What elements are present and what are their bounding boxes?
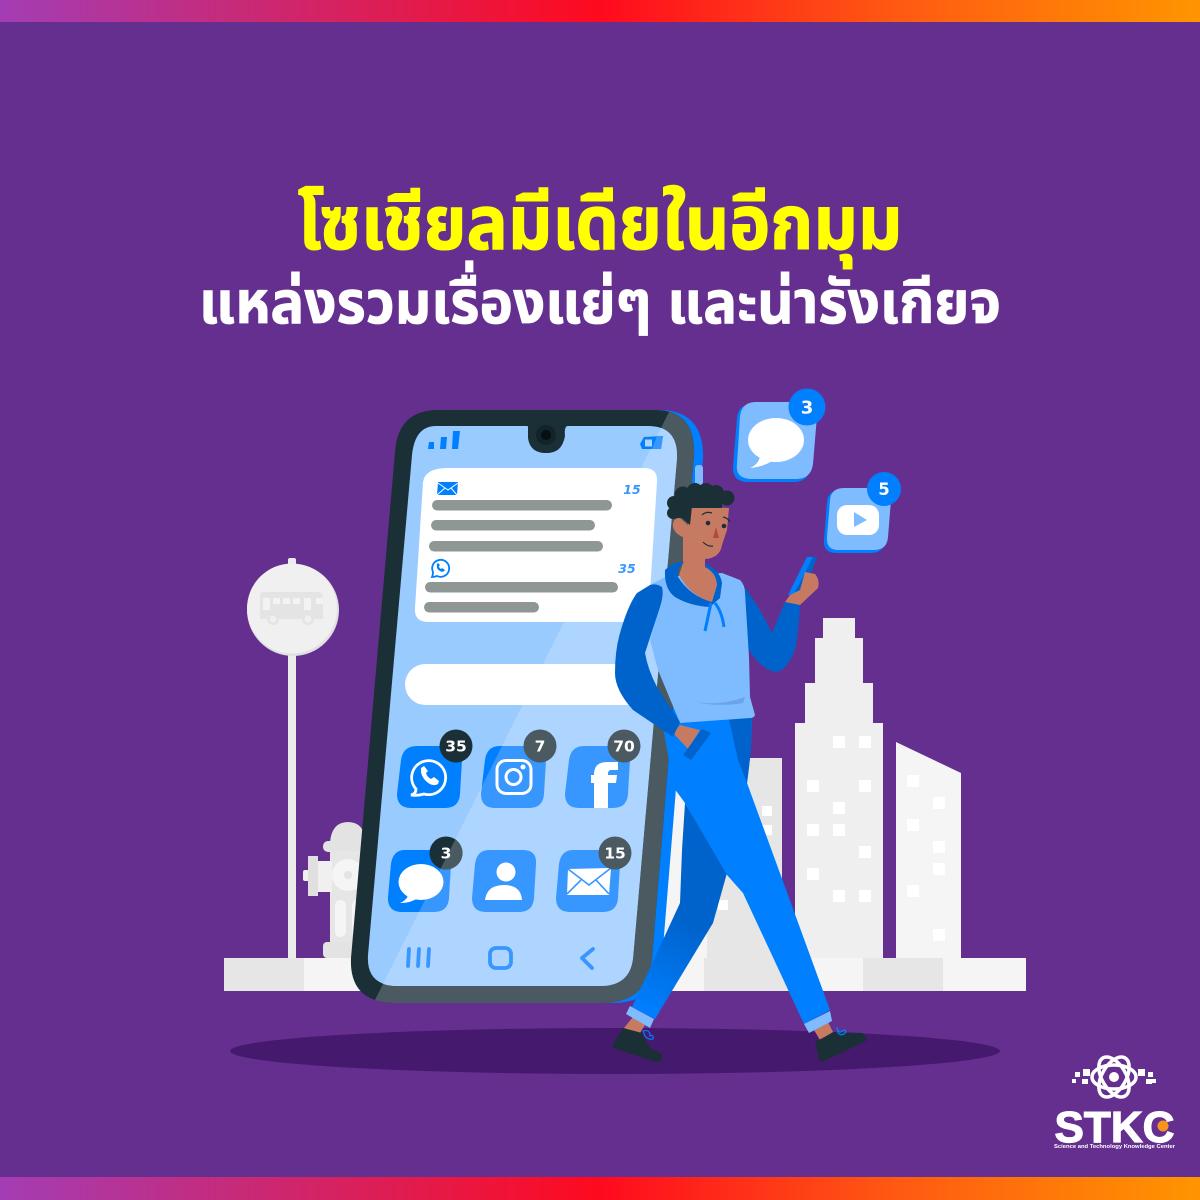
left cuff and ankle bbox=[624, 1006, 654, 1036]
icon: speech bubble bbox=[748, 418, 804, 468]
logo wordmark: STKC bbox=[1054, 1103, 1174, 1152]
pants shadow bbox=[728, 712, 752, 783]
pavement bbox=[224, 958, 1026, 991]
badge 3: 3 bbox=[801, 398, 813, 418]
hoodie body bbox=[650, 573, 755, 723]
icon: bus bbox=[260, 592, 323, 625]
hair bbox=[667, 483, 734, 525]
text placeholder lines bbox=[429, 500, 612, 552]
building behind person bbox=[660, 758, 782, 958]
badge 35 bbox=[440, 730, 472, 762]
tile: messages bbox=[388, 850, 451, 912]
camera notch bbox=[528, 425, 566, 453]
tall stepped building bbox=[795, 618, 883, 958]
neck and face bbox=[673, 506, 729, 602]
badge 5: 5 bbox=[878, 480, 890, 499]
icon: instagram glyph bbox=[497, 760, 531, 794]
whatsapp notification bbox=[424, 560, 636, 612]
badge 7 bbox=[524, 730, 556, 762]
icon: speech bubble bbox=[398, 864, 444, 903]
text placeholder lines bbox=[424, 582, 618, 612]
person walking with phone bbox=[612, 483, 866, 1062]
right shoe bbox=[815, 1032, 866, 1062]
hoodie drawstrings bbox=[705, 603, 724, 631]
city skyline and pavement bbox=[224, 618, 1026, 991]
icon: envelope bbox=[437, 482, 458, 495]
right cuff and ankle bbox=[804, 1011, 833, 1040]
hand bbox=[785, 572, 819, 605]
tile: contact bbox=[472, 850, 536, 912]
icon: envelope bbox=[567, 868, 611, 895]
mail notification bbox=[429, 482, 641, 552]
badge 3 bbox=[430, 836, 462, 870]
hoodie hem shadow bbox=[687, 697, 745, 705]
slanted-roof building bbox=[896, 742, 961, 958]
badge 70 bbox=[608, 730, 640, 762]
subtitle: แหล่งรวมเรื่องแย่ๆ และน่ารังเกียจ bbox=[199, 260, 1001, 336]
signal bars bbox=[428, 431, 460, 449]
icon: whatsapp bbox=[432, 560, 449, 577]
bus stop sign bbox=[247, 558, 339, 958]
badge 7: 7 bbox=[535, 738, 545, 756]
screen bbox=[368, 426, 677, 986]
logo tagline: Science and Technology Knowledge Center bbox=[1054, 1144, 1175, 1150]
phone body bbox=[351, 410, 694, 1003]
tile: instagram bbox=[481, 746, 546, 808]
logo orange dot bbox=[1158, 1120, 1168, 1132]
shoe laces bbox=[643, 1027, 846, 1039]
icon: play button bbox=[837, 505, 879, 535]
tile: whatsapp bbox=[397, 746, 462, 808]
icon: whatsapp glyph bbox=[411, 761, 446, 795]
badge 35: 35 bbox=[445, 738, 467, 756]
count 35: 35 bbox=[618, 561, 636, 576]
notification card bbox=[415, 468, 657, 622]
ground shadow bbox=[230, 1028, 1000, 1074]
battery icon bbox=[640, 436, 663, 449]
held phone bbox=[788, 557, 817, 595]
count 15: 15 bbox=[623, 482, 641, 497]
title: โซเชียลมีเดียในอีกมุม bbox=[298, 181, 902, 269]
logo atom mark bbox=[1072, 1052, 1156, 1102]
app icon tiles bbox=[388, 746, 630, 912]
badge 15 bbox=[598, 836, 632, 870]
hood collar bbox=[665, 562, 722, 607]
right sleeve bbox=[740, 582, 800, 672]
bottom gradient bar bbox=[0, 1177, 1200, 1200]
phone back edge bbox=[590, 410, 703, 1003]
badge 15: 15 bbox=[604, 844, 626, 862]
notification badges bbox=[430, 730, 640, 870]
pocket hand bbox=[673, 725, 711, 760]
STKC logo bbox=[1054, 1052, 1175, 1152]
left sleeve bbox=[615, 584, 680, 737]
icon: facebook f bbox=[591, 762, 618, 808]
badge 3: 3 bbox=[441, 844, 451, 862]
navigation bar icons bbox=[408, 948, 593, 968]
icon: person bbox=[485, 862, 522, 900]
smartphone bbox=[351, 410, 703, 1003]
top gradient bar bbox=[0, 0, 1200, 22]
floating message bubble bbox=[733, 388, 826, 482]
floating video bubble bbox=[824, 472, 901, 553]
tile: facebook bbox=[565, 746, 630, 808]
facial features bbox=[702, 512, 730, 546]
back leg bbox=[632, 803, 727, 1019]
fire hydrant bbox=[303, 822, 368, 958]
side button bbox=[695, 465, 703, 485]
front leg bbox=[663, 710, 830, 1024]
left shoe bbox=[612, 1028, 662, 1062]
search bar bbox=[405, 664, 653, 705]
tile: mail bbox=[556, 850, 620, 912]
badge 70: 70 bbox=[613, 738, 635, 756]
